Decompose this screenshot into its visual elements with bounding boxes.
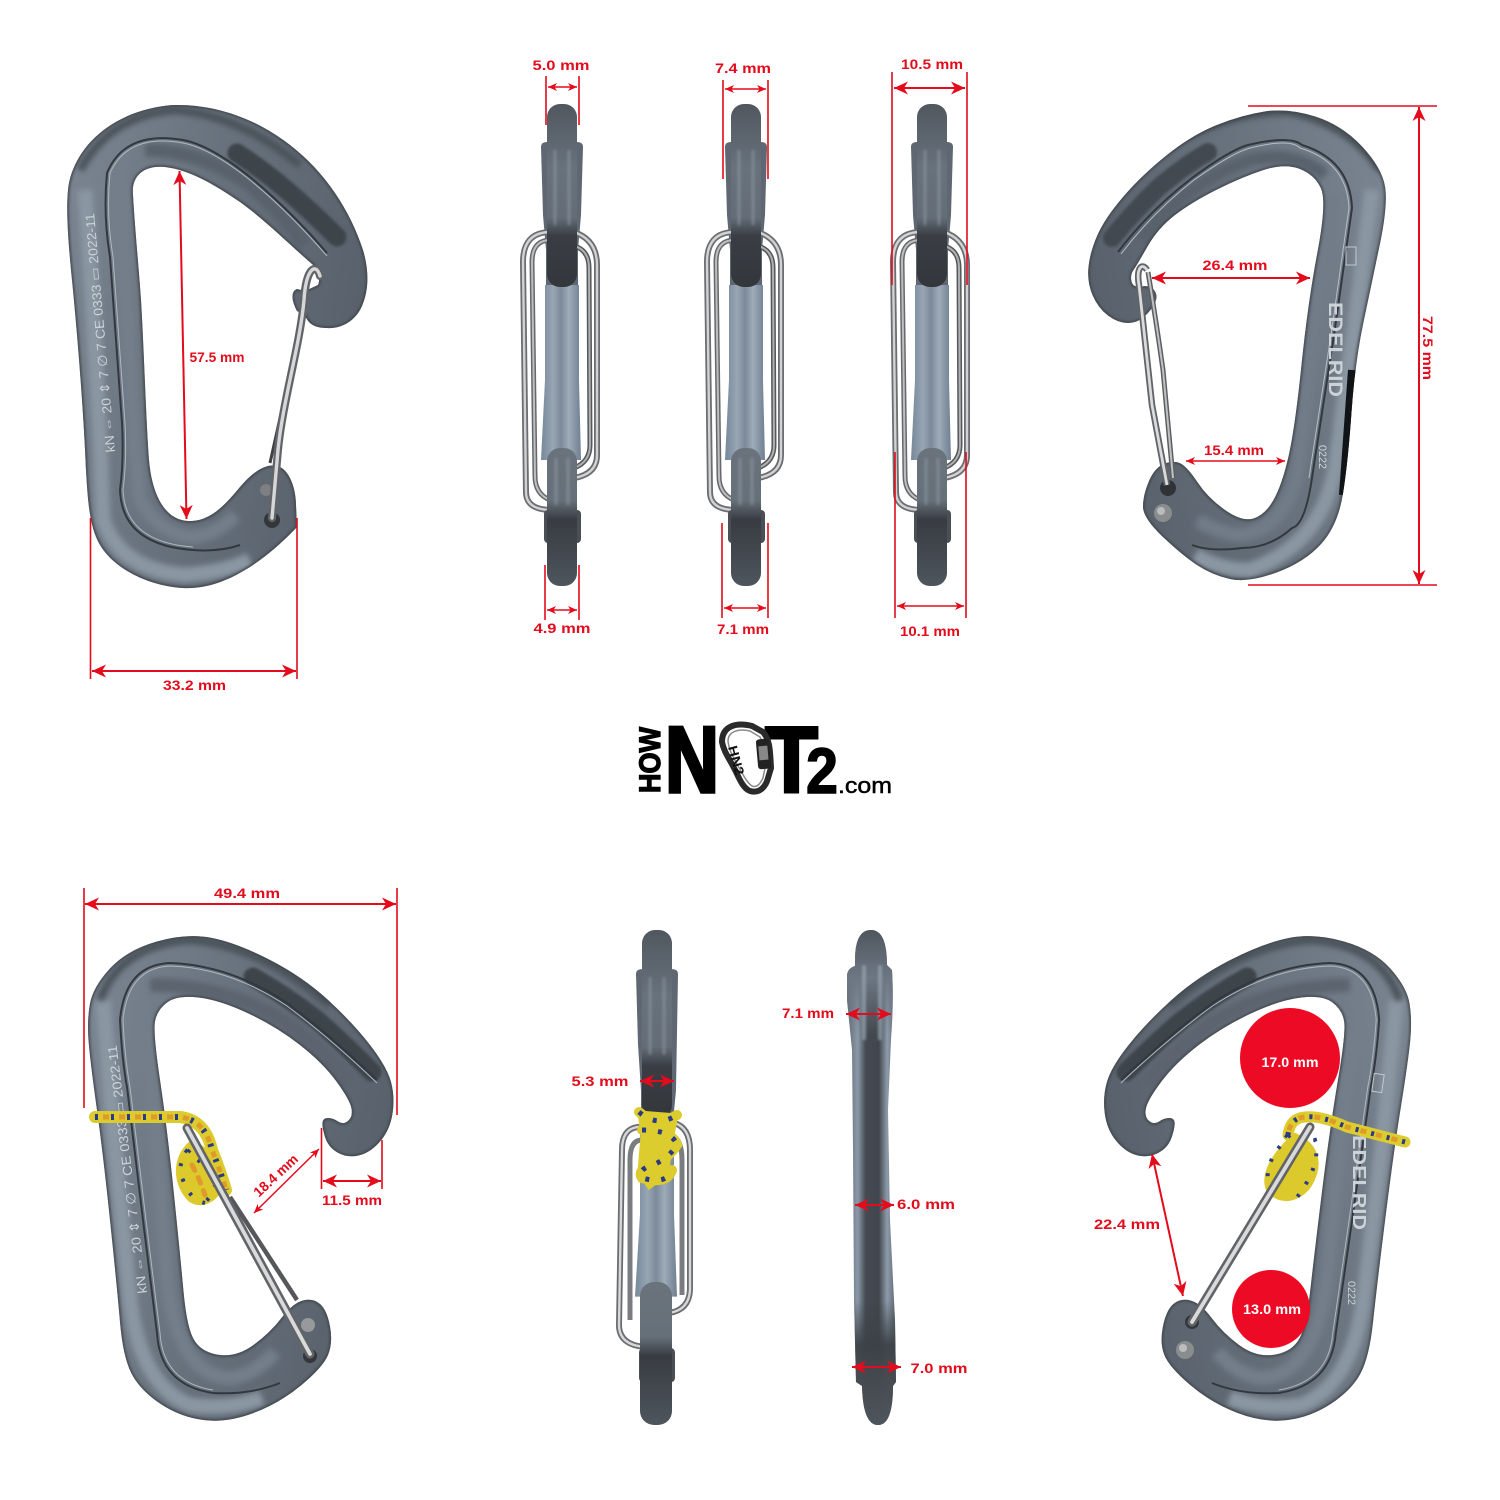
height 77.5 mm (1248, 106, 1437, 585)
rope knot (1266, 1117, 1405, 1200)
bottom ear (640, 1282, 672, 1425)
clearance circle 17.0 mm (1240, 1008, 1340, 1108)
gate opening 22.4 mm (1094, 1154, 1183, 1296)
measurements: top row (90, 56, 1437, 693)
side view 4 with rope (619, 930, 690, 1425)
7.0 mm (852, 1360, 968, 1376)
5.3 mm: 5.3 mm (572, 1073, 628, 1089)
.com: .com (838, 773, 892, 798)
wire gate (1138, 266, 1173, 485)
7.4 mm: 7.4 mm (715, 60, 771, 76)
10.1 mm (895, 452, 966, 639)
26.4 mm: 26.4 mm (1202, 257, 1268, 273)
15.4 mm (1186, 442, 1285, 461)
letter T: T (765, 707, 818, 812)
rivet (1176, 1315, 1199, 1359)
side view 1 with wire gate (523, 104, 597, 586)
numeral 2: 2 (806, 735, 838, 807)
width 49.4 mm: 49.4 mm (214, 885, 280, 901)
EDELRID engraving: EDELRID (1324, 302, 1345, 397)
gate opening 22.4 mm: 22.4 mm (1094, 1216, 1160, 1232)
nose width 11.5 mm: 11.5 mm (322, 1192, 382, 1208)
5.3 mm (572, 1073, 674, 1089)
width 33.2 mm: 33.2 mm (163, 677, 226, 693)
wire gate (260, 269, 320, 528)
gate opening 18.4 mm: 18.4 mm (250, 1151, 301, 1200)
carabiner: bottom-right reverse open gate with rope (1098, 936, 1413, 1421)
batch number 0222: 0222 (1316, 445, 1328, 469)
rope knot (95, 1117, 226, 1205)
carabiner: top-left face view with gate closed (67, 105, 367, 588)
logo carabiner: HN2 (725, 744, 747, 777)
carabiner: top-right reverse face view (1088, 110, 1386, 580)
width 33.2 mm (90, 518, 297, 693)
6.0 mm (855, 1196, 955, 1212)
clearance circle 17.0 mm: 17.0 mm (1262, 1054, 1318, 1070)
5.0 mm: 5.0 mm (532, 57, 590, 73)
logo: HowNOT2.com (634, 707, 892, 812)
15.4 mm: 15.4 mm (1204, 442, 1264, 458)
7.4 mm (715, 60, 771, 179)
rope (639, 1112, 677, 1188)
10.5 mm (892, 56, 967, 285)
side view 3 with wire gate (893, 104, 967, 586)
engraved icon (1372, 1073, 1384, 1093)
side view 5 spine (847, 930, 896, 1425)
clearance circle 13.0 mm: 13.0 mm (1243, 1301, 1301, 1317)
batch number: 0222 (1345, 1281, 1357, 1305)
gate-side inner length 57.5 mm: 57.5 mm (190, 349, 244, 365)
gate-side inner length 57.5 mm (180, 171, 244, 519)
EDELRID engraving: EDELRID (1349, 1135, 1369, 1230)
10.5 mm: 10.5 mm (901, 56, 963, 72)
nose width 11.5 mm (322, 1128, 382, 1208)
HOW: HOW (634, 726, 667, 793)
open wire gate (1192, 1127, 1310, 1322)
side view 2 with wire gate (707, 104, 781, 586)
clearance circle 13.0 mm (1232, 1270, 1310, 1348)
logo carabiner (722, 725, 771, 792)
4.9 mm: 4.9 mm (534, 620, 590, 636)
7.1 mm: 7.1 mm (782, 1005, 834, 1021)
5.0 mm (532, 57, 590, 125)
stamped markings: kN ⇔ 20 ⇕ 7 ∅ 7 CE 0333 ▭ 2022-11 (105, 1044, 150, 1294)
7.1 mm (717, 523, 769, 637)
width 49.4 mm (84, 885, 397, 1115)
rivet (1154, 480, 1176, 522)
open wire gate (187, 1128, 317, 1363)
gate opening 18.4 mm (250, 1149, 319, 1213)
stamped markings on spine: kN ⇔ 20 ⇕ 7 ∅ 7 CE 0333 ▭ 2022-11 (82, 213, 118, 453)
4.9 mm (534, 565, 590, 636)
10.1 mm: 10.1 mm (900, 623, 960, 639)
6.0 mm: 6.0 mm (897, 1196, 955, 1212)
carabiner: bottom-left open gate with rope (88, 936, 393, 1421)
7.1 mm: 7.1 mm (717, 621, 769, 637)
letter N: N (665, 707, 719, 812)
7.1 mm (782, 1005, 891, 1021)
7.0 mm: 7.0 mm (910, 1360, 968, 1376)
height 77.5 mm: 77.5 mm (1420, 316, 1436, 380)
measurements: bottom row (84, 885, 1183, 1376)
engraved icon (1346, 247, 1356, 265)
wire loop (619, 1122, 690, 1347)
